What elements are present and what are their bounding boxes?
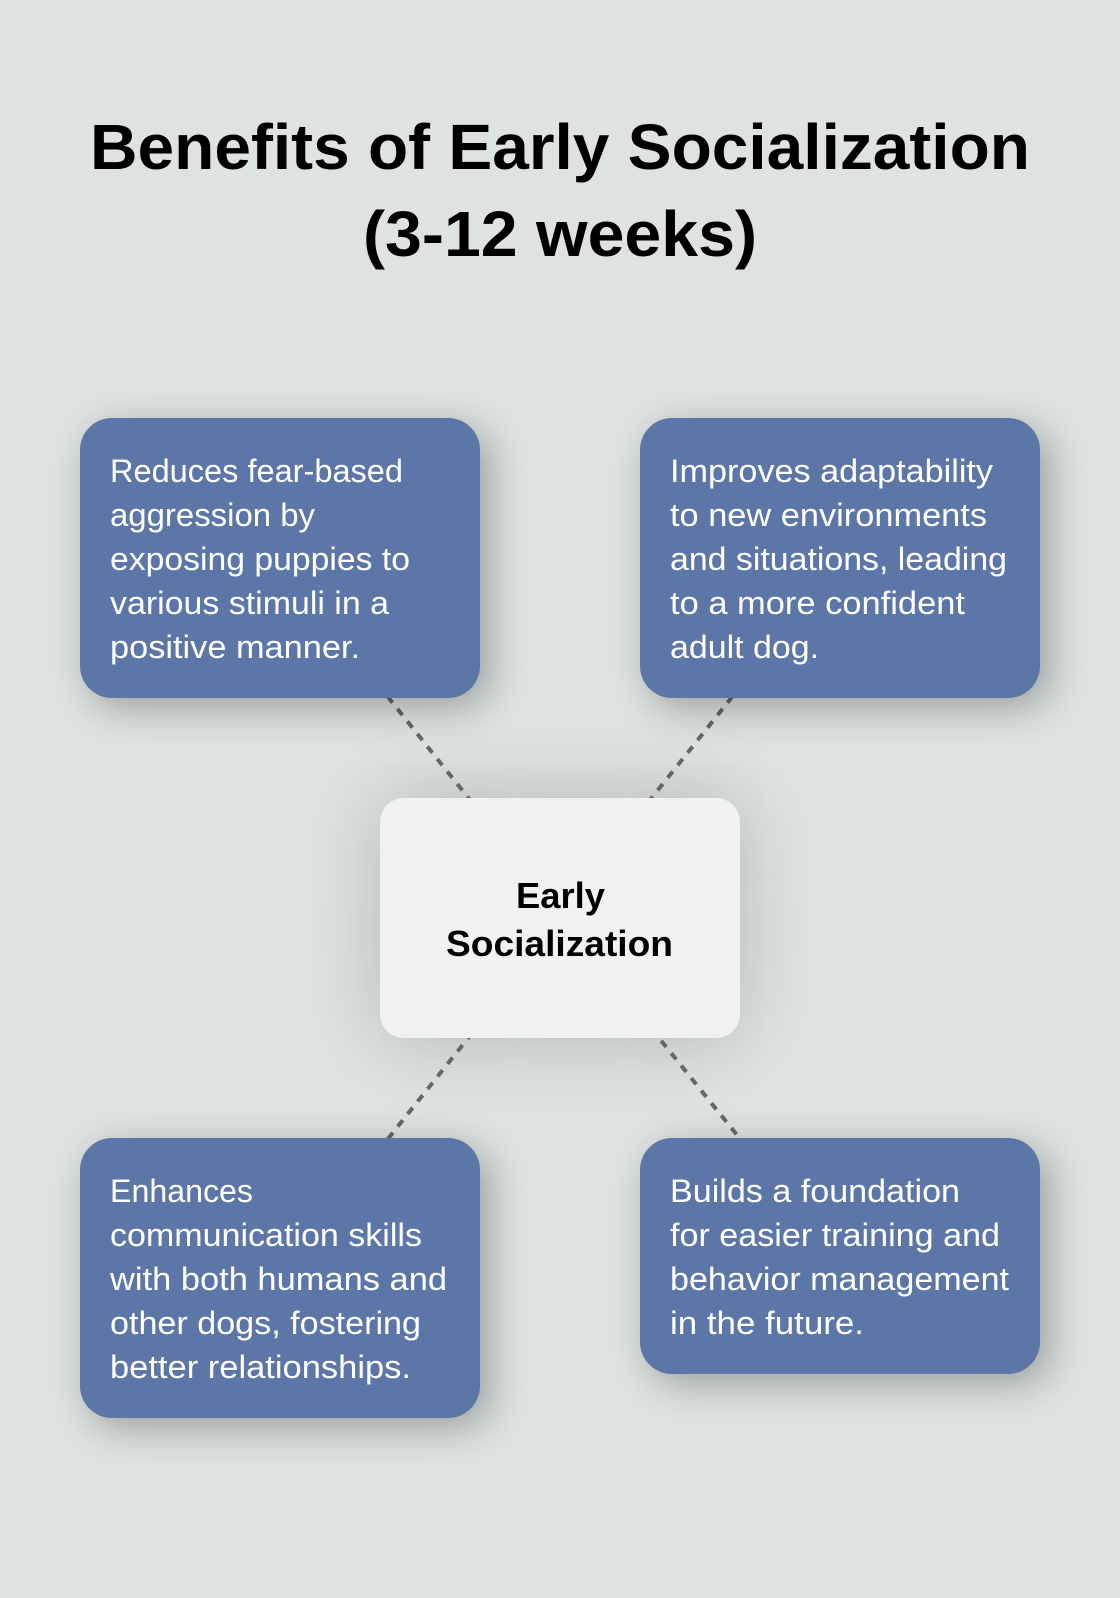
panel: center early socialization: Early bbox=[516, 875, 605, 916]
panel: reduces fear-based aggression: various stimuli in a bbox=[110, 585, 389, 621]
panel: builds a foundation: in the future. bbox=[670, 1305, 864, 1341]
panel: improves adaptability: adult dog. bbox=[670, 629, 819, 665]
title: Benefits of Early Socialization bbox=[90, 111, 1030, 183]
title: (3-12 weeks) bbox=[363, 198, 757, 270]
panel: builds a foundation: Builds a foundation bbox=[670, 1173, 960, 1209]
panel: reduces fear-based aggression: Reduces fear-based bbox=[110, 453, 403, 489]
title bbox=[90, 111, 1030, 270]
panel: builds a foundation: for easier training and bbox=[670, 1217, 1000, 1253]
panel: enhances communication skills: other dogs, fostering bbox=[110, 1305, 421, 1341]
panel: improves adaptability: and situations, leading bbox=[670, 541, 1007, 577]
panel: enhances communication skills bbox=[80, 1138, 480, 1418]
panel: reduces fear-based aggression: aggression by bbox=[110, 497, 315, 533]
panel: improves adaptability bbox=[640, 418, 1040, 698]
panel: improves adaptability: Improves adaptability bbox=[670, 453, 993, 489]
panel: improves adaptability: to a more confident bbox=[670, 585, 965, 621]
panel: center early socialization bbox=[380, 798, 740, 1038]
panel: enhances communication skills: with both humans and bbox=[109, 1261, 447, 1297]
panel: reduces fear-based aggression bbox=[80, 418, 480, 698]
panel: enhances communication skills: better relationships. bbox=[110, 1349, 411, 1385]
center node glow bbox=[380, 798, 740, 1038]
panel: reduces fear-based aggression: positive manner. bbox=[110, 629, 360, 665]
panel: improves adaptability: to new environments bbox=[670, 497, 987, 533]
panel: reduces fear-based aggression: exposing puppies to bbox=[110, 541, 410, 577]
panel: center early socialization: Socialization bbox=[446, 923, 673, 964]
panel: builds a foundation: behavior management bbox=[670, 1261, 1009, 1297]
panel: enhances communication skills: Enhances bbox=[110, 1173, 253, 1209]
panel: enhances communication skills: communication skills bbox=[110, 1217, 422, 1253]
panel: builds a foundation bbox=[640, 1138, 1040, 1374]
